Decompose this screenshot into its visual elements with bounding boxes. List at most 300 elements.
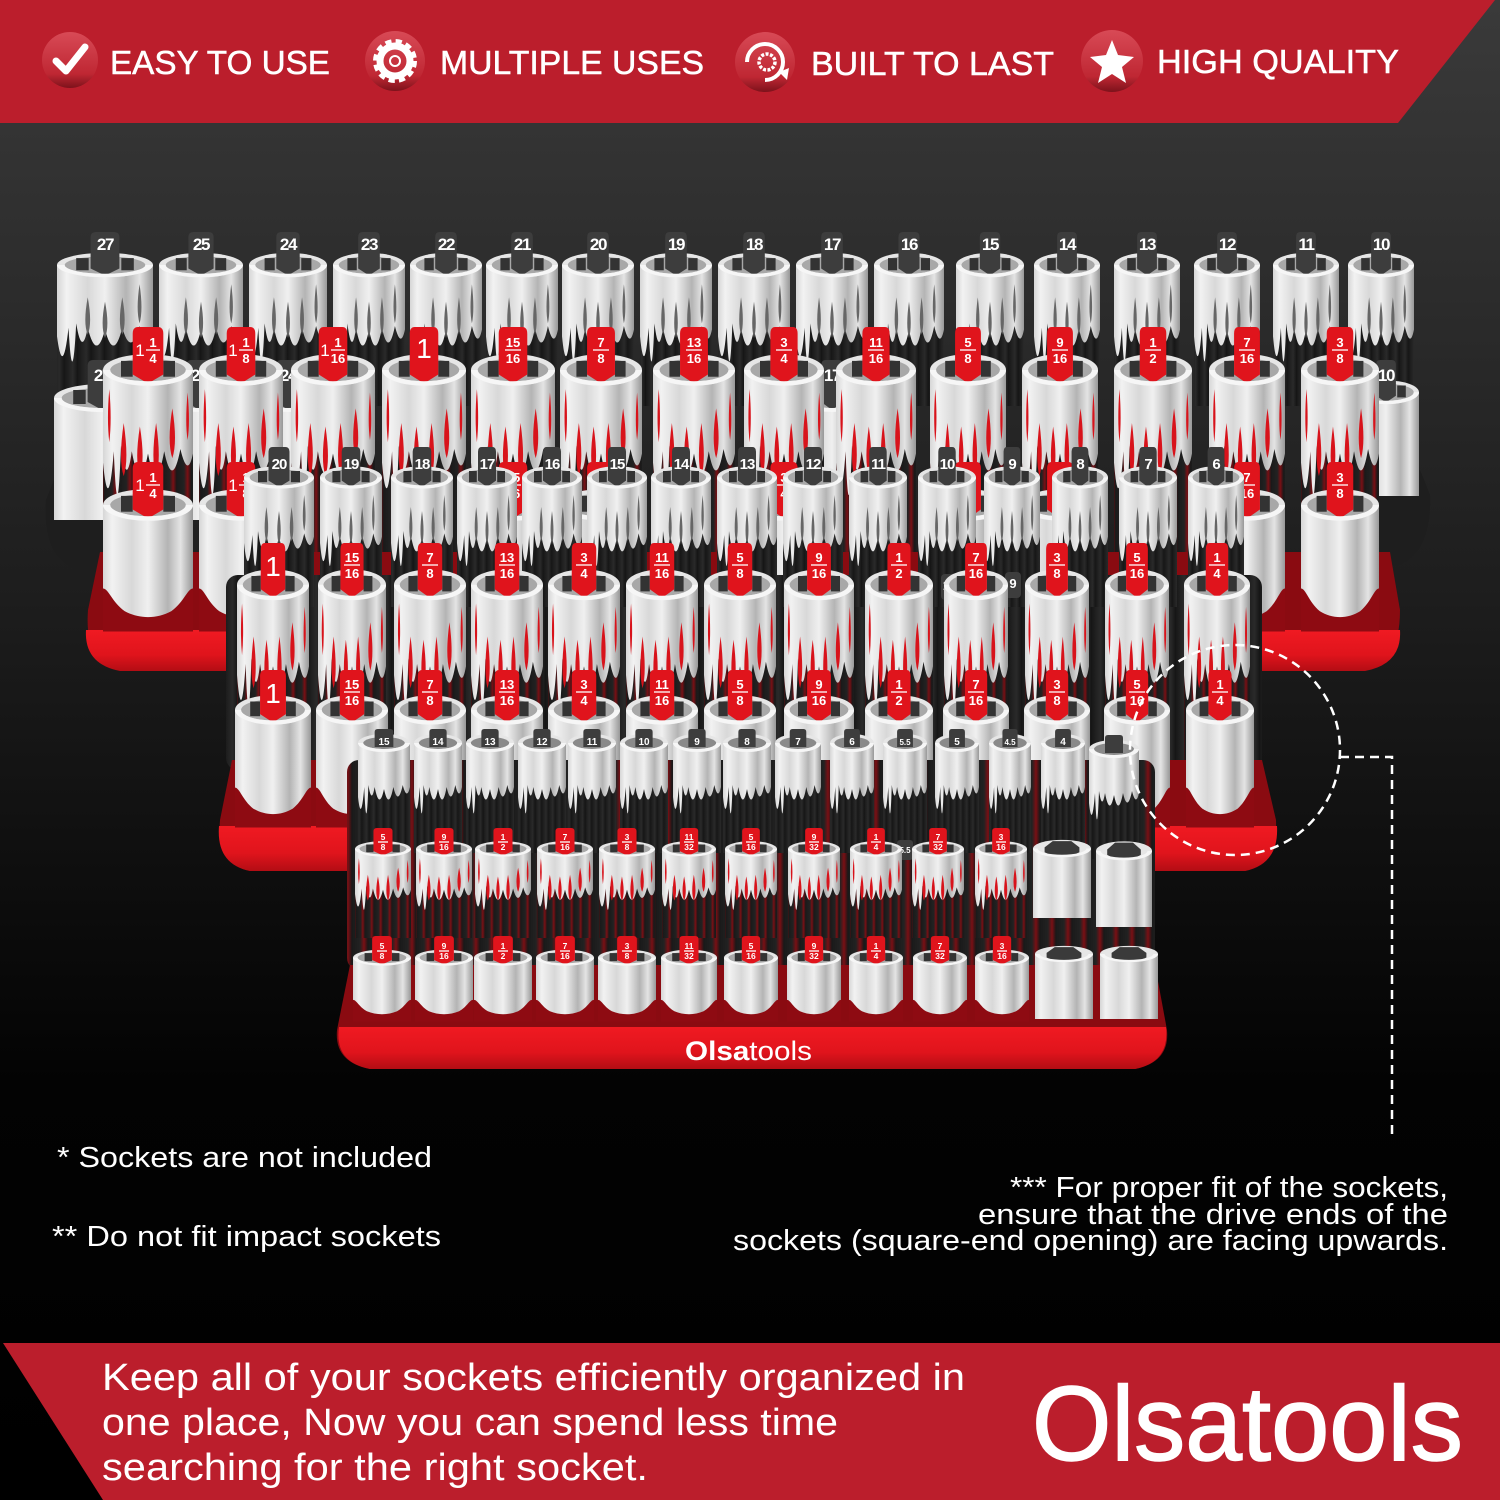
- socket 24 front: 24: [280, 366, 298, 385]
- footer message: Keep all of your sockets efficiently organized in: [102, 1357, 965, 1399]
- socket 9/32: 9: [812, 832, 817, 842]
- socket 9/16: 16: [812, 566, 826, 581]
- socket 11: 11: [871, 456, 886, 473]
- socket 5/8: [704, 670, 776, 828]
- row: small black metric sockets: [358, 729, 1139, 859]
- socket 13/16: [653, 327, 735, 553]
- socket 1/2: [474, 936, 532, 1022]
- socket 1: 1: [416, 333, 432, 364]
- socket 3/16: [975, 828, 1027, 938]
- socket 5/16: 16: [1130, 693, 1144, 708]
- socket 1/2: [475, 828, 531, 938]
- socket 13: [1114, 232, 1180, 406]
- socket 9/16: [784, 543, 854, 763]
- socket 16: [522, 447, 582, 607]
- socket 3/4 front: [744, 462, 824, 632]
- socket 5/8 front: 8: [964, 486, 972, 501]
- row: black metric sockets, middle tier: [244, 447, 1244, 607]
- socket 1 1/8 front: 1: [228, 476, 238, 495]
- socket 12: [783, 447, 843, 607]
- socket 20: 20: [590, 235, 607, 254]
- socket 17: 17: [824, 235, 841, 254]
- socket 1/2: 2: [1149, 351, 1157, 366]
- socket 1/4: 1: [1216, 677, 1224, 692]
- socket 1/4: 4: [874, 842, 879, 852]
- socket 14: [414, 729, 462, 853]
- socket 10: [1348, 232, 1414, 406]
- socket 7/32: 7: [936, 832, 941, 842]
- socket 27: [57, 232, 153, 406]
- socket 3/4 front: 4: [780, 486, 788, 501]
- socket 5/8: [353, 936, 411, 1022]
- socket 9/32: 9: [812, 941, 817, 951]
- socket 25: 25: [193, 235, 210, 254]
- socket 9: 9: [694, 737, 700, 748]
- socket 5/8: 5: [380, 941, 385, 951]
- socket 1/2: 2: [501, 951, 506, 961]
- socket 13: [466, 729, 514, 853]
- socket 8: 8: [744, 737, 750, 748]
- socket 1: 1: [265, 678, 281, 709]
- row: red SAE sockets, back: [103, 327, 1379, 553]
- socket 3/4: 4: [580, 566, 588, 581]
- socket 7: [1119, 447, 1177, 607]
- socket 5/8: 5: [736, 550, 744, 565]
- socket 11/16: 16: [655, 566, 669, 581]
- socket 4: 4: [1060, 737, 1066, 748]
- red tray, middle tier: [219, 760, 1277, 871]
- socket 18: 18: [415, 456, 430, 473]
- socket 5/16: [725, 828, 777, 938]
- socket 15: [956, 232, 1024, 406]
- socket 3/8: 3: [625, 941, 630, 951]
- socket 1 1/4: 1: [149, 335, 157, 350]
- socket 9/32: [787, 936, 841, 1022]
- socket 7/16 front: [1209, 462, 1285, 632]
- socket hex small: [1100, 946, 1158, 1019]
- socket 9/16: 9: [442, 941, 447, 951]
- socket 4: [1041, 729, 1085, 853]
- socket 11/16: 11: [869, 335, 883, 350]
- socket 7/32: 7: [938, 941, 943, 951]
- socket 7/8: [394, 670, 466, 828]
- socket 16: [874, 232, 944, 406]
- note: proper fit: sockets (square-end opening) are facing upwards.: [733, 1225, 1448, 1257]
- socket 9/16: 9: [442, 832, 447, 842]
- socket 11: 11: [1298, 235, 1315, 254]
- icon: star: [1081, 30, 1143, 92]
- socket 5/8: 8: [736, 566, 744, 581]
- socket 1: 1: [265, 551, 281, 582]
- socket 5/16: 16: [1130, 566, 1144, 581]
- socket 14: 14: [432, 737, 444, 748]
- socket 17: [796, 232, 868, 406]
- socket 1/2: 2: [895, 693, 903, 708]
- socket 7: 7: [795, 737, 801, 748]
- socket 8: [723, 729, 771, 853]
- socket 22: [410, 232, 482, 406]
- socket 23: [333, 232, 405, 406]
- socket 19: 19: [344, 456, 359, 473]
- socket 5/16: 5: [749, 941, 754, 951]
- tab 10: 10: [943, 578, 957, 593]
- socket 7/16: 7: [972, 550, 980, 565]
- socket 1 1/16: 16: [331, 351, 345, 366]
- socket 18: [718, 232, 790, 406]
- socket 1: [382, 327, 466, 553]
- socket 3/8: 3: [625, 832, 630, 842]
- socket 1/2: [1114, 327, 1192, 553]
- footer message: [102, 1357, 965, 1489]
- socket 6: [830, 729, 874, 853]
- socket 7/16: 7: [563, 832, 568, 842]
- socket 9/16: 9: [1056, 335, 1064, 350]
- socket 5/8 front: 5: [964, 470, 972, 485]
- socket 9/16: 16: [439, 842, 449, 852]
- socket 15: [358, 729, 410, 853]
- socket 7/8 front: 7: [597, 470, 605, 485]
- socket 14: [1034, 232, 1100, 406]
- socket 3/8 front: 8: [1336, 486, 1344, 501]
- label: easy to use: EASY TO USE: [110, 44, 330, 81]
- socket 6: 6: [849, 737, 855, 748]
- socket 1/4: [850, 828, 902, 938]
- socket 9/32: 32: [809, 842, 819, 852]
- socket 13: 13: [1139, 235, 1156, 254]
- socket 1 1/4: 1: [135, 341, 145, 360]
- socket 15: 15: [610, 456, 625, 473]
- socket 17: [457, 447, 517, 607]
- socket 3/4: 3: [580, 677, 588, 692]
- socket 21: [486, 232, 558, 406]
- socket 5/8: 5: [381, 832, 386, 842]
- footer message: searching for the right socket.: [102, 1447, 648, 1489]
- socket 13/16: 16: [500, 566, 514, 581]
- footer logo: Olsa: [1032, 1365, 1242, 1483]
- socket 5/16: 5: [1133, 677, 1141, 692]
- socket 3/4 front: 3: [780, 470, 788, 485]
- socket 15/16: 15: [345, 550, 359, 565]
- socket 11/16: [836, 327, 916, 553]
- socket 1 1/16: 1: [320, 341, 330, 360]
- red tray, upper tier: [86, 552, 1400, 671]
- socket 7/8: 8: [597, 351, 605, 366]
- socket 15: 15: [378, 737, 390, 748]
- socket 3/16: 3: [999, 832, 1004, 842]
- header banner: [0, 0, 1495, 123]
- socket 7/32: [913, 936, 967, 1022]
- socket 11/32: 11: [684, 832, 694, 842]
- socket 1 1/8 front: 1: [242, 470, 250, 485]
- socket 1/2: 1: [895, 677, 903, 692]
- footer logo: tools: [1242, 1365, 1463, 1483]
- socket 10: [620, 729, 668, 853]
- socket 5/8: [704, 543, 776, 763]
- socket 1 1/4: 4: [149, 351, 157, 366]
- socket blank: [1089, 735, 1139, 859]
- socket 15/16: 16: [506, 351, 520, 366]
- socket 3/8 front: 3: [1336, 470, 1344, 485]
- socket 1/2: 1: [501, 832, 506, 842]
- socket 1/2: 1: [895, 550, 903, 565]
- socket 5/16: [1105, 543, 1169, 763]
- socket 3/8: 3: [1053, 550, 1061, 565]
- socket 9/16: [416, 828, 472, 938]
- socket 3/8: 8: [1053, 566, 1061, 581]
- socket 9/16 front: 9: [1056, 470, 1064, 485]
- socket 11/32: [661, 936, 717, 1022]
- socket 7/8 front: 8: [597, 486, 605, 501]
- socket 1/4: [1186, 670, 1254, 828]
- black tray, middle tier: [226, 575, 1262, 770]
- socket 12: [1194, 232, 1260, 406]
- socket 7/16: 7: [1243, 335, 1251, 350]
- socket 18: [391, 447, 453, 607]
- socket 1 1/8 front: 8: [242, 486, 250, 501]
- socket 5/16: 16: [746, 842, 756, 852]
- socket hex large: [1033, 840, 1091, 918]
- socket 9/16: 16: [812, 693, 826, 708]
- socket 7: 7: [1144, 456, 1152, 473]
- socket 19: 19: [668, 235, 685, 254]
- socket 1 1/16: 1: [334, 335, 342, 350]
- note: sockets not included: * Sockets are not included: [57, 1142, 432, 1174]
- socket 5/8: 5: [964, 335, 972, 350]
- note: proper fit: *** For proper fit of the sockets,: [1010, 1172, 1448, 1204]
- socket 7/16: 16: [560, 842, 570, 852]
- socket 15/16: [471, 327, 555, 553]
- socket 18: 18: [746, 235, 763, 254]
- socket 15/16 front: [471, 462, 555, 632]
- socket 15/16: 16: [345, 693, 359, 708]
- socket 3/8: [599, 828, 655, 938]
- row: red SAE sockets, middle tier back: [237, 543, 1250, 763]
- socket 15/16: [318, 543, 386, 763]
- socket 1/2: 2: [501, 842, 506, 852]
- socket 7/16 front: 16: [1240, 486, 1254, 501]
- socket 11/32: 32: [684, 842, 694, 852]
- socket 16: 16: [545, 456, 560, 473]
- socket 15/16: 16: [345, 566, 359, 581]
- socket 9/16: 16: [1053, 351, 1067, 366]
- socket 11/32: [662, 828, 716, 938]
- socket 1/4: 4: [874, 951, 879, 961]
- socket 1/2: [865, 543, 933, 763]
- socket 14: [651, 447, 711, 607]
- socket 1 1/4 front: 1: [135, 476, 145, 495]
- socket 3/16: 16: [997, 951, 1007, 961]
- socket 15/16: 15: [506, 335, 520, 350]
- black tray, small tier: [347, 760, 1155, 970]
- socket 5/8: [930, 327, 1006, 553]
- socket 5/16: [1104, 670, 1170, 828]
- socket 7/16: 16: [560, 951, 570, 961]
- row: black metric sockets, back tier: [57, 232, 1414, 406]
- socket 3/8: 8: [1336, 351, 1344, 366]
- socket 14: 14: [1059, 235, 1077, 254]
- socket 15/16: 15: [345, 677, 359, 692]
- socket 12: [518, 729, 566, 853]
- socket 7/32: 32: [935, 951, 945, 961]
- socket 5/16: 5: [1133, 550, 1141, 565]
- socket 1/4: 4: [1216, 693, 1224, 708]
- socket 1/2: 1: [501, 941, 506, 951]
- note: proper fit: ensure that the drive ends of the: [978, 1199, 1448, 1231]
- socket 1 1/4 front: 1: [149, 470, 157, 485]
- socket 7/16 front: 7: [1243, 470, 1251, 485]
- label: high quality: HIGH QUALITY: [1157, 43, 1399, 80]
- socket 1 1/8: 1: [228, 341, 238, 360]
- label: multiple uses: MULTIPLE USES: [440, 44, 704, 81]
- socket 17: 17: [480, 456, 495, 473]
- socket 5: [935, 729, 979, 853]
- socket 11/32: 32: [684, 951, 694, 961]
- socket 3/8: 8: [625, 842, 630, 852]
- row: red SAE sockets, front: [103, 462, 1379, 632]
- socket 5/8: 8: [381, 842, 386, 852]
- socket 3/4: [744, 327, 824, 553]
- socket 1 1/16: [291, 327, 375, 553]
- socket 1/4: 1: [874, 832, 879, 842]
- socket 5/8: 8: [964, 351, 972, 366]
- footer logo: [1032, 1365, 1463, 1483]
- socket 7/8: 7: [426, 550, 434, 565]
- socket 3/4: 4: [780, 351, 788, 366]
- socket 3/8: 8: [1053, 693, 1061, 708]
- socket 9: [984, 447, 1040, 607]
- socket 3/4: [548, 670, 620, 828]
- socket 7/16: 7: [563, 941, 568, 951]
- socket 9/16 front: [1022, 462, 1098, 632]
- socket 13/16: [471, 670, 543, 828]
- socket 9/16: [415, 936, 473, 1022]
- footer banner: [3, 1343, 1500, 1500]
- socket 7/8: [394, 543, 466, 763]
- socket 10: 10: [638, 737, 650, 748]
- socket 15: [587, 447, 647, 607]
- socket 10: 10: [1373, 235, 1390, 254]
- socket 14: 14: [674, 456, 690, 473]
- icon: check mark: [42, 32, 98, 88]
- socket 9/32: 32: [809, 951, 819, 961]
- socket 24: 24: [280, 235, 298, 254]
- socket 3/4: 3: [580, 550, 588, 565]
- socket 7/32: [912, 828, 964, 938]
- socket 7/16: [537, 828, 593, 938]
- socket 25: [159, 232, 243, 406]
- socket 7/8: 8: [426, 566, 434, 581]
- socket 3/8: 3: [1053, 677, 1061, 692]
- socket 13/16: 16: [500, 693, 514, 708]
- socket 20: [244, 447, 314, 607]
- socket 1/4: [1184, 543, 1250, 763]
- socket 1: [237, 543, 309, 763]
- socket 9/16: 9: [815, 550, 823, 565]
- socket 1/4: 4: [1213, 566, 1221, 581]
- tray logo: Olsatools: [685, 1036, 812, 1066]
- socket 1: [235, 670, 311, 828]
- socket 11/32: 11: [684, 941, 694, 951]
- socket 1 1/4 front: 4: [149, 486, 157, 501]
- black tabs peeking from the hidden second row: [941, 572, 1021, 600]
- socket 15: 15: [982, 235, 999, 254]
- socket 3/8: [1025, 543, 1089, 763]
- socket 5/16: 5: [749, 832, 754, 842]
- socket 12: 12: [536, 737, 548, 748]
- row: small red sockets, back: [355, 828, 1152, 938]
- socket 13/16: 13: [500, 677, 514, 692]
- note: impact sockets: ** Do not fit impact sockets: [52, 1221, 441, 1253]
- socket 6: 6: [1212, 456, 1220, 473]
- socket hex small: [1096, 841, 1152, 927]
- socket 7/16: 16: [969, 693, 983, 708]
- socket 1/4: 1: [874, 941, 879, 951]
- black tray back, left and right ends: [46, 470, 1430, 570]
- socket 13/16: 13: [687, 335, 701, 350]
- socket 1 1/8 front: [199, 462, 283, 632]
- socket 25 front: [157, 360, 241, 520]
- socket 17 front: 17: [824, 366, 841, 385]
- socket 5/8: 8: [736, 693, 744, 708]
- socket 11/16: [626, 670, 698, 828]
- socket 1/2: [865, 670, 933, 828]
- socket 5/16: 16: [746, 951, 756, 961]
- socket 1/4: [849, 936, 903, 1022]
- socket 3/4: 4: [580, 693, 588, 708]
- tab 5.5 peeking from the second small row: 5.5: [899, 846, 911, 855]
- socket 17 front: [796, 360, 868, 520]
- socket 7/16: [944, 543, 1008, 763]
- socket 5/8: 5: [736, 677, 744, 692]
- socket 13/16: 16: [687, 351, 701, 366]
- socket 6: [1188, 447, 1244, 607]
- socket 1 1/8: [199, 327, 283, 553]
- footer message: one place, Now you can spend less time: [102, 1402, 838, 1444]
- socket 5.5: 5.5: [899, 738, 911, 747]
- socket 10: 10: [940, 456, 955, 473]
- socket 5.5: [883, 729, 927, 853]
- socket 15/16 front: 16: [506, 486, 520, 501]
- socket 1 1/4 front: [103, 462, 193, 632]
- socket 5/16: [724, 936, 778, 1022]
- socket 9/16: [784, 670, 854, 828]
- socket 9/16 front: 16: [1053, 486, 1067, 501]
- socket 27 front: 27: [94, 366, 111, 385]
- socket 7/16: [536, 936, 594, 1022]
- socket 24 front: [249, 360, 327, 520]
- socket 4.5: [989, 729, 1031, 853]
- red tray, front tier: [337, 965, 1167, 1069]
- socket 3/16: 16: [996, 842, 1006, 852]
- socket 19: [640, 232, 712, 406]
- icon: gear: [365, 31, 425, 91]
- socket 7/32: 32: [933, 842, 943, 852]
- socket 25 front: 25: [191, 366, 208, 385]
- socket 12: 12: [806, 456, 821, 473]
- dashed callout circle and connector: [1130, 645, 1392, 1140]
- socket 7/8: 7: [597, 335, 605, 350]
- socket 27: 27: [97, 235, 114, 254]
- socket 23: 23: [361, 235, 378, 254]
- socket 20: [562, 232, 634, 406]
- socket 11: [568, 729, 616, 853]
- socket 21: 21: [514, 235, 531, 254]
- socket 5: 5: [954, 737, 960, 748]
- row: black metric sockets, second row visible parts: [54, 360, 1419, 520]
- socket 13: 13: [484, 737, 496, 748]
- socket 7/8: [560, 327, 642, 553]
- socket 9/32: [788, 828, 840, 938]
